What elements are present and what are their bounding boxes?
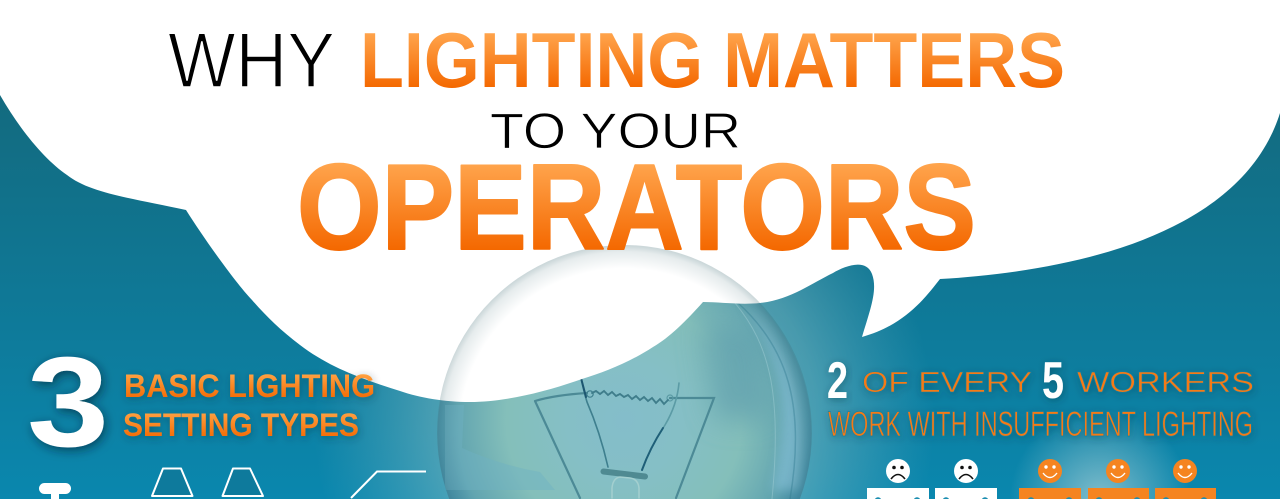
- icon: happy worker two: [1088, 459, 1149, 499]
- title line: why: WHY: [168, 16, 335, 104]
- icon: unhappy worker two: [935, 459, 997, 499]
- heading: setting types: SETTING TYPES: [123, 407, 359, 443]
- icon: pendant lamp two: [222, 468, 263, 496]
- filament support wires: [535, 378, 714, 498]
- icon: happy worker one: [1019, 459, 1081, 499]
- icon: happy worker three: [1155, 459, 1216, 499]
- number 5: 5: [1042, 352, 1064, 410]
- number 2: 2: [827, 352, 848, 410]
- icon: task lamp: [39, 483, 71, 499]
- panel: lighting setting types: [27, 331, 426, 499]
- text: workers: WORKERS: [1077, 367, 1254, 399]
- title line: operators: OPERATORS: [297, 139, 976, 275]
- title: [168, 16, 1065, 275]
- text: of every: OF EVERY: [862, 367, 1032, 399]
- icon: unhappy worker one: [867, 459, 929, 499]
- title line: lighting matters: LIGHTING MATTERS: [360, 16, 1065, 104]
- icon: arc lamp: [351, 472, 426, 498]
- heading: basic lighting: BASIC LIGHTING: [124, 368, 375, 404]
- big number 3: 3: [27, 331, 109, 474]
- title line: to your: TO YOUR: [490, 103, 741, 159]
- bulb glass rim overlay: [437, 245, 812, 499]
- light bulb glass and filament: [438, 302, 812, 499]
- panel: workers statistic: [827, 352, 1254, 499]
- icon: pendant lamp one: [152, 468, 192, 496]
